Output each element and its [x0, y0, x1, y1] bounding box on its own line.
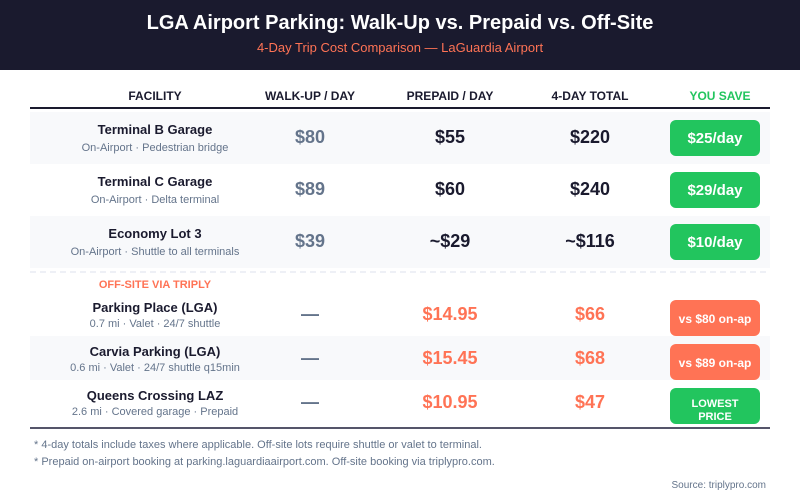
row: Carvia Parking: [30, 336, 770, 380]
badge: vs $80 on-ap: vs $80 on-ap: [679, 312, 751, 326]
name: Terminal B Garage: Terminal B Garage: [98, 122, 212, 137]
total: ~$116: ~$116: [565, 231, 615, 251]
prepaid: $15.45: $15.45: [422, 348, 478, 368]
badge: $29/day: $29/day: [687, 182, 743, 199]
walk-up: none: —: [301, 348, 319, 368]
total: $47: $47: [575, 392, 605, 412]
row: Terminal B Garage: [30, 112, 770, 164]
badge: lowest price: LOWEST: [691, 398, 739, 410]
badge: $10/day: [670, 224, 760, 260]
prepaid: $10.95: $10.95: [422, 392, 478, 412]
name: Queens Crossing LAZ: Queens Crossing LAZ: [87, 388, 223, 403]
prepaid: ~$29: ~$29: [430, 231, 470, 251]
name: Terminal C Garage: Terminal C Garage: [98, 174, 212, 189]
badge: lowest price: [670, 388, 760, 424]
title: LGA Airport Parking: Walk-Up vs. Prepaid vs. Off-Site: [147, 12, 653, 34]
column header: you save: YOU SAVE: [689, 89, 751, 103]
walk-up: $39: $39: [295, 231, 325, 251]
column header: walk-up per day: WALK-UP / DAY: [265, 89, 355, 103]
walk-up: none: —: [301, 392, 319, 412]
details: Terminal B Garage: On-Airport · Pedestrian bridge: [82, 142, 228, 154]
walk-up: $89: $89: [295, 179, 325, 199]
badge: $25/day: [670, 120, 760, 156]
name: Economy Lot 3: Economy Lot 3: [108, 226, 202, 241]
subtitle: 4-Day Trip Cost Comparison — LaGuardia Airport: [257, 40, 543, 55]
badge: $29/day: [670, 172, 760, 208]
footnote: booking: * Prepaid on-airport booking at parking.laguardiaairport.com. Off-site booking via triplypro.com.: [34, 456, 495, 468]
total: $240: $240: [570, 179, 610, 199]
details: Economy Lot 3: On-Airport · Shuttle to all terminals: [71, 246, 239, 258]
total: $66: $66: [575, 304, 605, 324]
badge: $10/day: $10/day: [687, 234, 743, 251]
column header: 4-day total: 4-DAY TOTAL: [552, 89, 628, 103]
prepaid: $60: $60: [435, 179, 465, 199]
source: Source: triplypro.com: [672, 480, 766, 491]
total: $220: $220: [570, 127, 610, 147]
footnote: totals: * 4-day totals include taxes where applicable. Off-site lots require shuttle or valet to terminal.: [34, 439, 482, 451]
badge: vs $89 on-ap: [670, 344, 760, 380]
badge: vs $89 on-ap: vs $89 on-ap: [679, 356, 751, 370]
details: Parking Place: 0.7 mi · Valet · 24/7 shuttle: [90, 318, 220, 330]
walk-up: $80: $80: [295, 127, 325, 147]
walk-up: none: —: [301, 304, 319, 324]
total: $68: $68: [575, 348, 605, 368]
badge: vs $80 on-ap: [670, 300, 760, 336]
column header: prepaid per day: PREPAID / DAY: [407, 89, 493, 103]
badge: lowest price: PRICE: [698, 411, 732, 423]
badge: $25/day: $25/day: [687, 130, 743, 147]
details: Queens Crossing LAZ: 2.6 mi · Covered garage · Prepaid: [72, 406, 238, 418]
name: Carvia Parking: Carvia Parking (LGA): [90, 344, 220, 359]
details: Terminal C Garage: On-Airport · Delta terminal: [91, 194, 219, 206]
prepaid: $55: $55: [435, 127, 465, 147]
name: Parking Place: Parking Place (LGA): [92, 300, 217, 315]
details: Carvia Parking: 0.6 mi · Valet · 24/7 shuttle q15min: [70, 362, 240, 374]
row: Economy Lot 3: [30, 216, 770, 268]
section label: off-site via Triply: OFF-SITE VIA TRIPLY: [99, 279, 211, 291]
header banner: [0, 0, 800, 70]
column header: facility: FACILITY: [128, 89, 182, 103]
prepaid: $14.95: $14.95: [422, 304, 478, 324]
